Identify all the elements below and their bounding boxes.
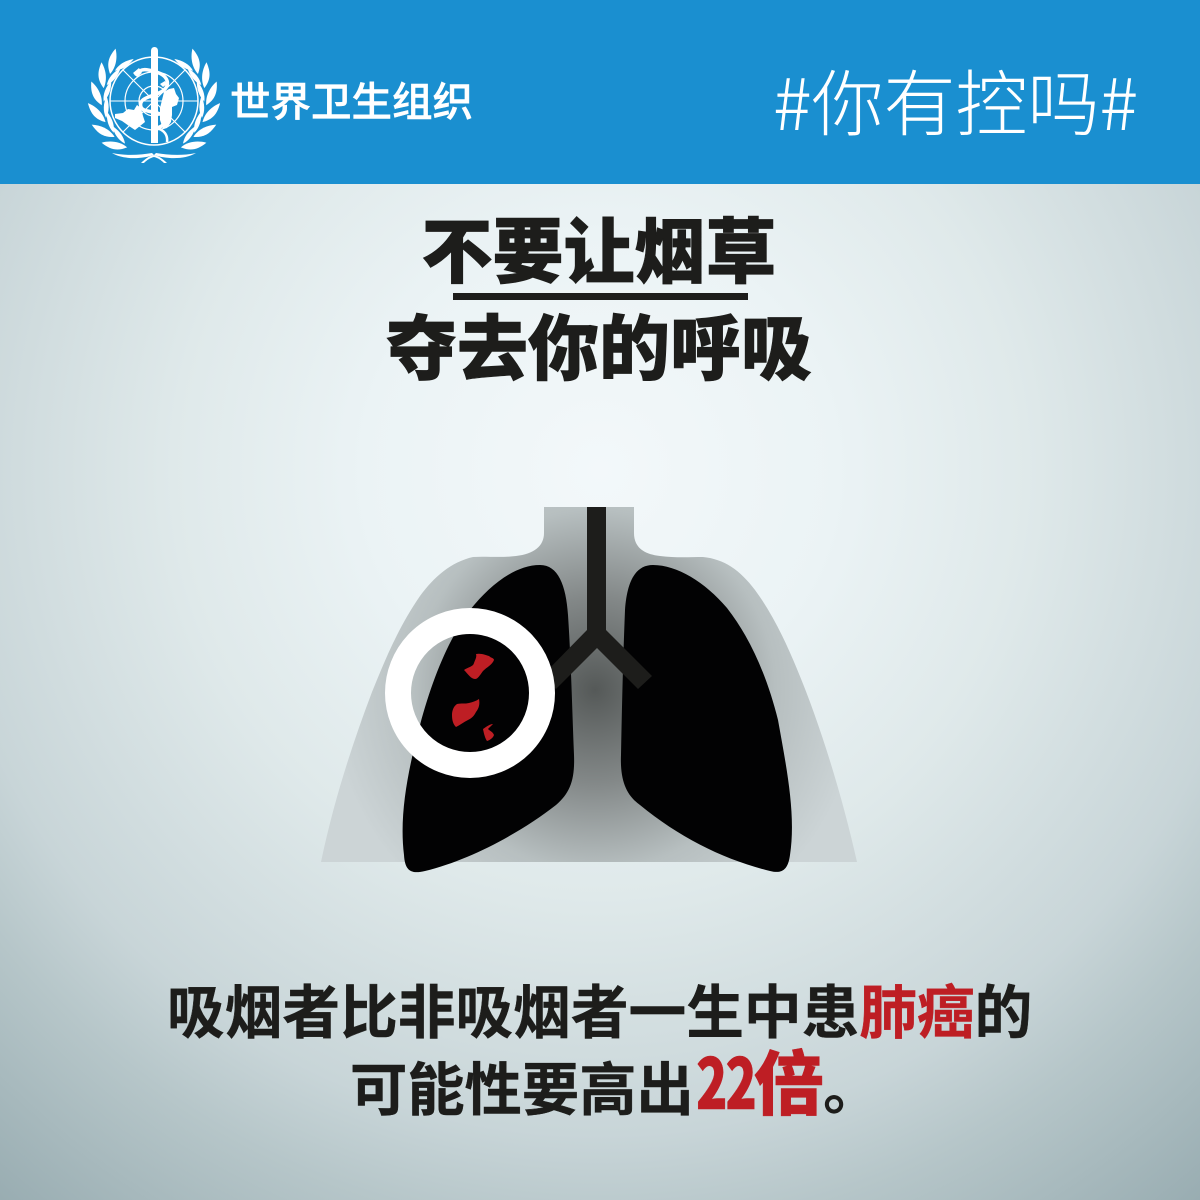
title line 1: 不要让烟草 [421, 196, 776, 298]
left lung [403, 565, 574, 872]
highlighted number [696, 1029, 822, 1130]
organisation name: 世界卫生组织 [230, 69, 473, 128]
icon: WHO emblem [88, 47, 220, 163]
hashtag: #你有控吗# [773, 46, 1138, 151]
statement line 1: 吸烟者比非吸烟者一生中患肺癌的 [167, 966, 1032, 1050]
statement line 2: 可能性要高出 [350, 1044, 694, 1127]
red tumour spots [452, 654, 494, 741]
highlighted number: 22 [696, 1029, 755, 1130]
title line 2: 夺去你的呼吸 [386, 293, 812, 395]
trachea and bronchi [542, 507, 652, 689]
body silhouette [321, 507, 857, 862]
right lung [621, 565, 792, 872]
title underline [453, 293, 748, 300]
highlighted number: 倍 [754, 1029, 821, 1130]
white magnifier ring [398, 621, 542, 765]
header band [0, 0, 1200, 184]
full stop: 。 [823, 1044, 880, 1126]
bottom statement [167, 966, 1032, 1130]
